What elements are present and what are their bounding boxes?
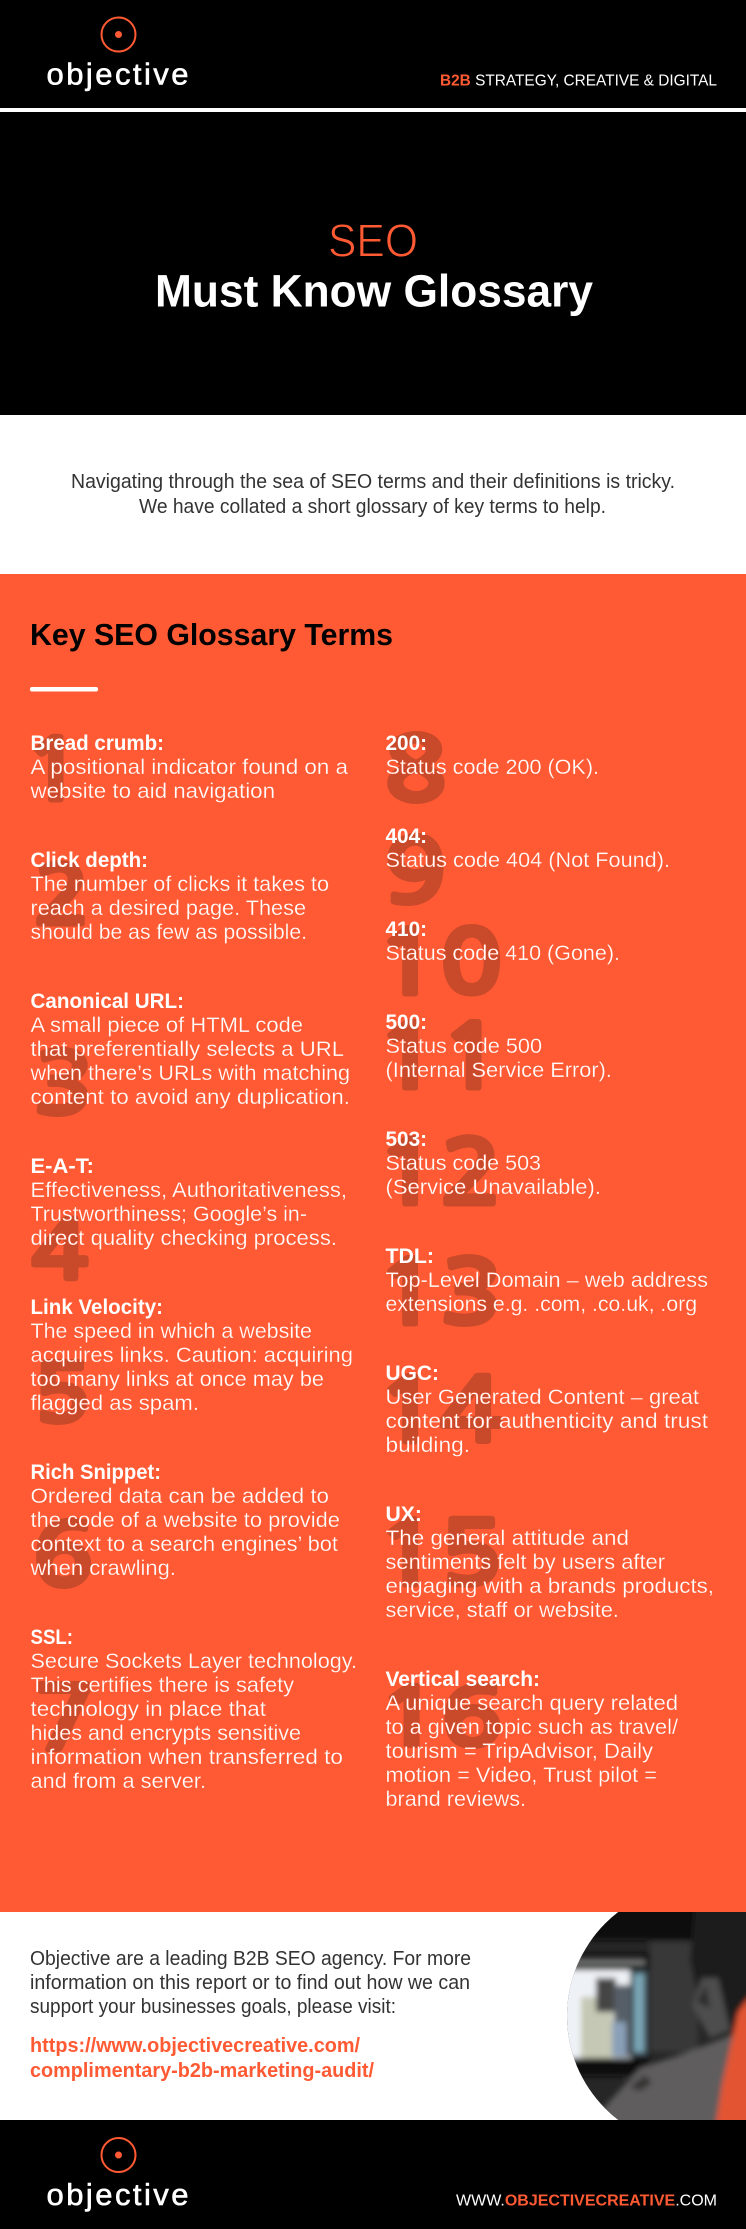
term 16: Vertical search: motion = Video, Trust pilot =: [386, 1764, 657, 1787]
logo: objective: objective: [46, 2177, 188, 2212]
term 16: Vertical search: Vertical search:: [386, 1668, 540, 1691]
term 15: UX: [376, 1503, 714, 1622]
term 5: Link Velocity: flagged as spam.: [30, 1392, 199, 1415]
term 3: Canonical URL: 3: [33, 1043, 94, 1127]
term 4: E-A-T: 4: [31, 1212, 89, 1292]
website address: WWW.OBJECTIVECREATIVE.COM: [456, 2192, 717, 2210]
logo: objective: [46, 18, 188, 92]
term 9: 404: 404:: [386, 825, 427, 848]
term 16: Vertical search: [378, 1668, 678, 1811]
intro text: Navigating through the sea of SEO terms and their definitions is tricky.: [71, 471, 675, 493]
term 6: Rich Snippet: when crawling.: [29, 1557, 176, 1580]
term 5: Link Velocity: The speed in which a website: [30, 1320, 312, 1343]
header band: [0, 0, 746, 108]
term 13: TDL: 13: [376, 1250, 503, 1338]
term 11: 500: 500:: [386, 1011, 427, 1034]
term 1: Bread crumb: website to aid navigation: [29, 780, 275, 803]
term 11: 500: Status code 500: [386, 1035, 542, 1058]
term 14: UGC: 14: [376, 1368, 503, 1456]
term 11: 500: 11: [376, 1014, 503, 1102]
term 4: E-A-T: direct quality checking process.: [30, 1227, 337, 1250]
footer band: [0, 2120, 746, 2229]
term 12: 503: Status code 503: [386, 1152, 541, 1175]
term 2: Click depth: 2: [33, 857, 91, 937]
logo: objective: objective: [46, 56, 188, 92]
term 6: Rich Snippet: [29, 1461, 340, 1599]
term 16: Vertical search: to a given topic such as travel/: [386, 1716, 678, 1739]
term 16: Vertical search: tourism = TripAdvisor, Daily: [386, 1740, 654, 1763]
term 7: SSL: SSL:: [30, 1626, 73, 1649]
intro text: We have collated a short glossary of key terms to help.: [139, 496, 606, 518]
panel: glossary: [0, 574, 746, 1912]
term 14: UGC: building.: [386, 1434, 470, 1457]
term 15: UX: UX:: [386, 1503, 422, 1526]
term 3: Canonical URL: that preferentially selects a URL: [30, 1038, 344, 1061]
photo: person at monitor in circle: [567, 1912, 746, 2120]
link: complimentary-b2b-marketing-audit/: [30, 2060, 374, 2082]
term 14: UGC: UGC:: [386, 1362, 439, 1385]
term 6: Rich Snippet: Rich Snippet:: [30, 1461, 161, 1484]
term 10: 410: Status code 410 (Gone).: [386, 942, 620, 965]
hero panel: [0, 112, 746, 415]
term 1: Bread crumb: [23, 729, 348, 813]
term 4: E-A-T: Effectiveness, Authoritativeness,: [30, 1179, 347, 1202]
term 9: 404: 9: [384, 829, 447, 917]
term 15: UX: 15: [376, 1511, 503, 1599]
term 13: TDL: TDL:: [386, 1245, 434, 1268]
term 8: 200: 8: [384, 727, 447, 815]
term 10: 410: 10: [376, 920, 503, 1008]
term 5: Link Velocity: too many links at once may be: [30, 1368, 324, 1391]
link: [30, 2035, 374, 2082]
term 5: Link Velocity: 5: [33, 1355, 91, 1435]
term 2: Click depth: should be as few as possible.: [30, 921, 307, 944]
intro text: [71, 471, 675, 518]
link: https://www.objectivecreative.com/: [30, 2035, 360, 2057]
term 13: TDL: extensions e.g. .com, .co.uk, .org: [386, 1293, 697, 1316]
tagline: B2B STRATEGY, CREATIVE & DIGITAL: [440, 72, 717, 90]
term 10: 410: [376, 918, 620, 1008]
term 2: Click depth: reach a desired page. These: [30, 897, 306, 920]
term 2: Click depth: Click depth:: [30, 849, 148, 872]
term 12: 503: 12: [376, 1130, 503, 1218]
term 7: SSL: and from a server.: [30, 1770, 206, 1793]
title: SEO: SEO: [328, 214, 418, 266]
term 10: 410: 410:: [386, 918, 427, 941]
term 1: Bread crumb: A positional indicator found on a: [30, 756, 348, 779]
term 8: 200: [384, 727, 599, 815]
term 8: 200: Status code 200 (OK).: [386, 756, 599, 779]
panel: call to action: [30, 1912, 746, 2120]
term 15: UX: The general attitude and: [386, 1527, 629, 1550]
term 7: SSL: information when transferred to: [30, 1746, 343, 1769]
call to action text: [30, 1948, 471, 2018]
term 4: E-A-T: [30, 1155, 347, 1292]
term 11: 500: [376, 1011, 612, 1102]
heading: Key SEO Glossary Terms: Key SEO Glossary Terms: [30, 617, 393, 652]
term 7: SSL: technology in place that: [30, 1698, 266, 1721]
term 3: Canonical URL: [29, 990, 350, 1127]
term 16: Vertical search: A unique search query related: [386, 1692, 678, 1715]
term 12: 503: (Service Unavailable).: [386, 1176, 601, 1199]
term 6: Rich Snippet: 6: [32, 1513, 94, 1599]
term 1: Bread crumb: 1: [23, 729, 84, 813]
term 6: Rich Snippet: context to a search engines’ bot: [30, 1533, 338, 1556]
term 13: TDL: [376, 1245, 708, 1338]
term 11: 500: (Internal Service Error).: [386, 1059, 612, 1082]
call to action text: support your businesses goals, please visit:: [30, 1996, 396, 2018]
term 8: 200: 200:: [386, 732, 427, 755]
term 15: UX: sentiments felt by users after: [386, 1551, 665, 1574]
term 6: Rich Snippet: Ordered data can be added to: [30, 1485, 329, 1508]
term 7: SSL: 7: [33, 1676, 96, 1764]
term 9: 404: [384, 825, 670, 917]
term 4: E-A-T: E-A-T:: [30, 1155, 94, 1178]
term 3: Canonical URL: A small piece of HTML code: [30, 1014, 303, 1037]
logo: objective: [46, 2138, 188, 2212]
term 5: Link Velocity: [30, 1296, 353, 1435]
term 12: 503: 503:: [386, 1128, 427, 1151]
term 15: UX: engaging with a brands products,: [386, 1575, 714, 1598]
term 3: Canonical URL: when there’s URLs with matching: [29, 1062, 350, 1085]
term 7: SSL: [30, 1626, 357, 1793]
term 15: UX: service, staff or website.: [386, 1599, 619, 1622]
term 6: Rich Snippet: the code of a website to provide: [30, 1509, 340, 1532]
title: Must Know Glossary: Must Know Glossary: [155, 266, 593, 316]
term 5: Link Velocity: acquires links. Caution: acquiring: [30, 1344, 353, 1367]
call to action text: Objective are a leading B2B SEO agency. For more: [30, 1948, 471, 1970]
term 13: TDL: Top-Level Domain – web address: [386, 1269, 708, 1292]
term 7: SSL: hides and encrypts sensitive: [30, 1722, 301, 1745]
term 7: SSL: Secure Sockets Layer technology.: [30, 1650, 357, 1673]
term 3: Canonical URL: content to avoid any duplication.: [30, 1086, 350, 1109]
term 14: UGC: User Generated Content – great: [386, 1386, 699, 1409]
term 5: Link Velocity: Link Velocity:: [30, 1296, 163, 1319]
term 3: Canonical URL: Canonical URL:: [30, 990, 184, 1013]
call to action text: information on this report or to find out how we can: [30, 1972, 470, 1994]
term 12: 503: [376, 1128, 601, 1218]
term 4: E-A-T: Trustworthiness; Google’s in-: [30, 1203, 307, 1226]
term 14: UGC: [376, 1362, 708, 1457]
term 9: 404: Status code 404 (Not Found).: [386, 849, 670, 872]
term 2: Click depth: [30, 849, 329, 944]
term 16: Vertical search: 16: [378, 1679, 503, 1759]
term 14: UGC: content for authenticity and trust: [386, 1410, 708, 1433]
term 2: Click depth: The number of clicks it takes to: [30, 873, 329, 896]
term 16: Vertical search: brand reviews.: [386, 1788, 526, 1811]
term 7: SSL: This certifies there is safety: [30, 1674, 295, 1697]
term 1: Bread crumb: Bread crumb:: [30, 732, 164, 755]
